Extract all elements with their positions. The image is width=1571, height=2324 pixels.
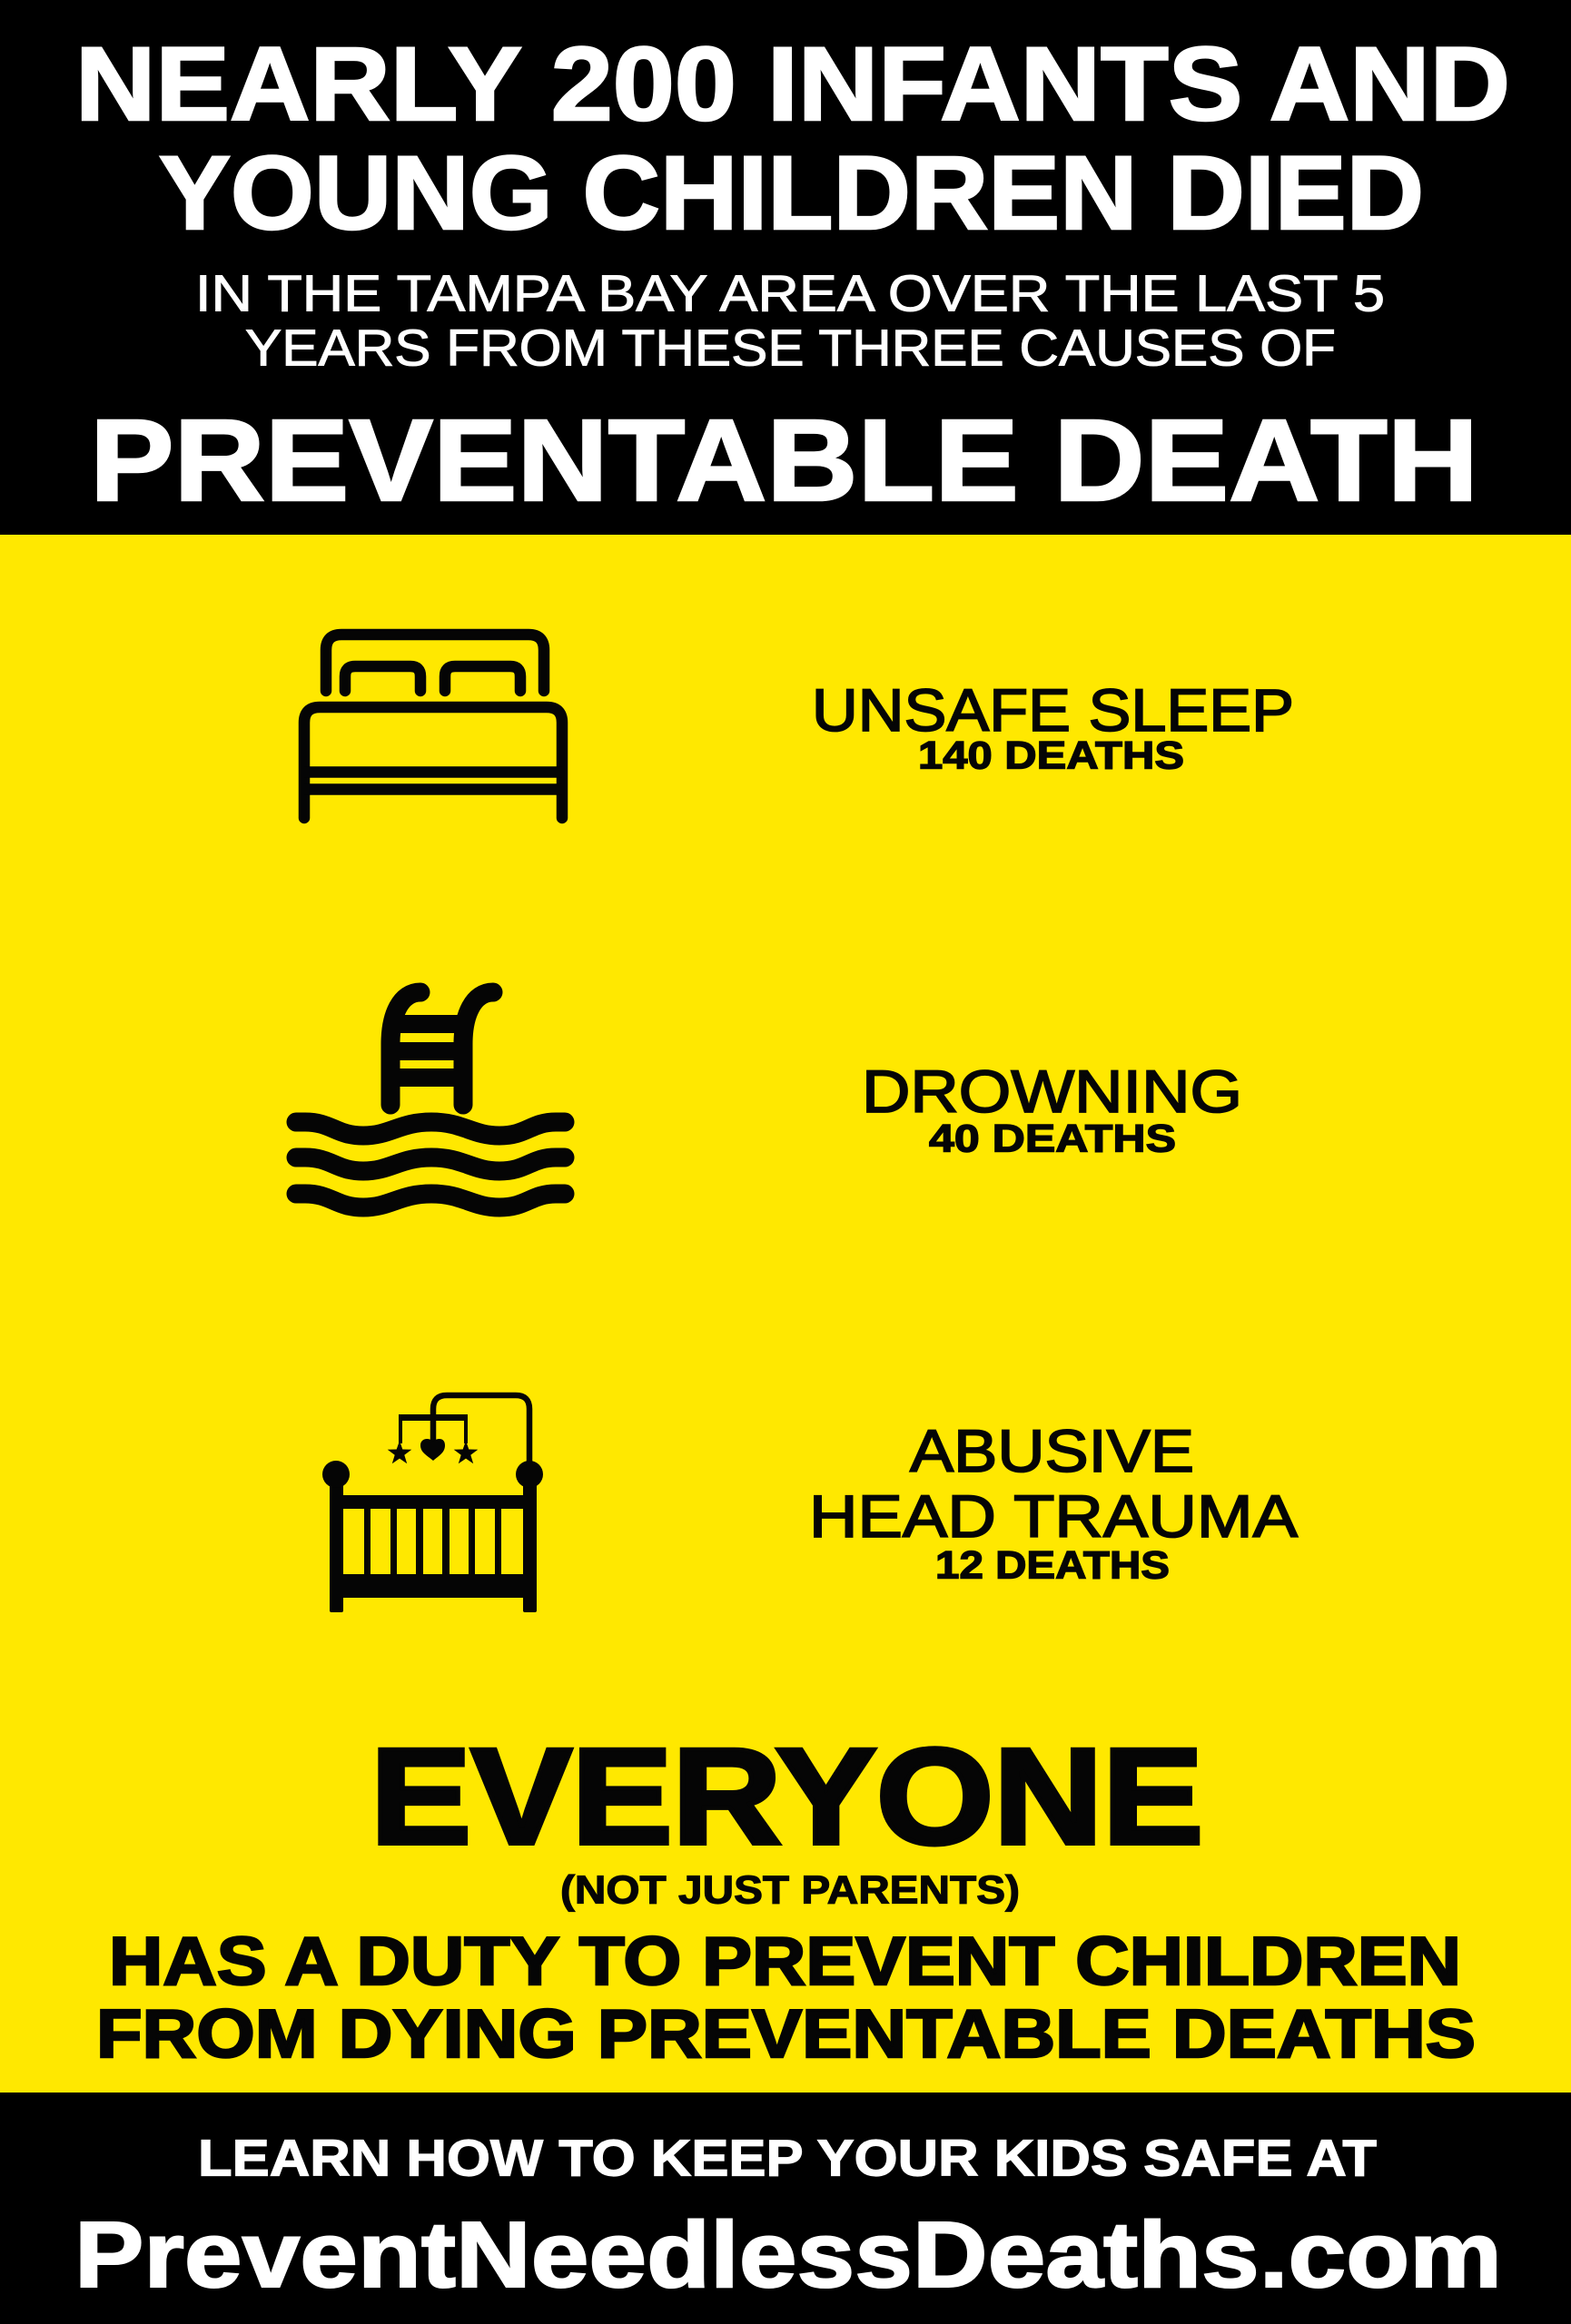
text: duty statement: FROM DYING PREVENTABLE DEATHS <box>96 1995 1476 2072</box>
panel: call to action <box>96 1719 1476 2072</box>
subtitle: YEARS FROM THESE THREE CAUSES OF <box>245 320 1336 378</box>
text: abusive head trauma: ABUSIVE <box>910 1417 1194 1484</box>
text: duty statement: HAS A DUTY TO PREVENT CHILDREN <box>109 1923 1461 1999</box>
title <box>75 26 1510 251</box>
title: YOUNG CHILDREN DIED <box>159 135 1424 251</box>
text: abusive head trauma <box>809 1417 1298 1587</box>
text: website: PreventNeedlessDeaths.com <box>74 2202 1502 2307</box>
text: not just parents: (NOT JUST PARENTS) <box>560 1868 1020 1912</box>
heading: everyone: EVERYONE <box>371 1719 1203 1872</box>
title: NEARLY 200 INFANTS AND <box>75 26 1510 143</box>
text: unsafe sleep: 140 DEATHS <box>918 734 1184 777</box>
panel: header <box>0 0 1571 535</box>
subtitle <box>195 265 1385 378</box>
panel: causes <box>296 635 1298 1612</box>
text: abusive head trauma: 12 DEATHS <box>935 1543 1170 1587</box>
icon: crib with mobile <box>322 1395 543 1612</box>
heading: preventable death: PREVENTABLE DEATH <box>90 396 1478 526</box>
text: learn how: LEARN HOW TO KEEP YOUR KIDS SAFE AT <box>198 2130 1377 2188</box>
text: unsafe sleep <box>812 676 1294 777</box>
text: drowning: 40 DEATHS <box>929 1117 1176 1160</box>
panel: footer <box>0 2093 1571 2324</box>
text: unsafe sleep: UNSAFE SLEEP <box>812 676 1294 743</box>
text: abusive head trauma: HEAD TRAUMA <box>809 1482 1298 1550</box>
icon: pool ladder and waves <box>296 992 565 1207</box>
text: drowning <box>862 1058 1242 1160</box>
text: drowning: DROWNING <box>862 1058 1242 1125</box>
subtitle: IN THE TAMPA BAY AREA OVER THE LAST 5 <box>195 265 1385 323</box>
text: duty statement <box>96 1923 1476 2072</box>
icon: bed <box>304 635 562 818</box>
